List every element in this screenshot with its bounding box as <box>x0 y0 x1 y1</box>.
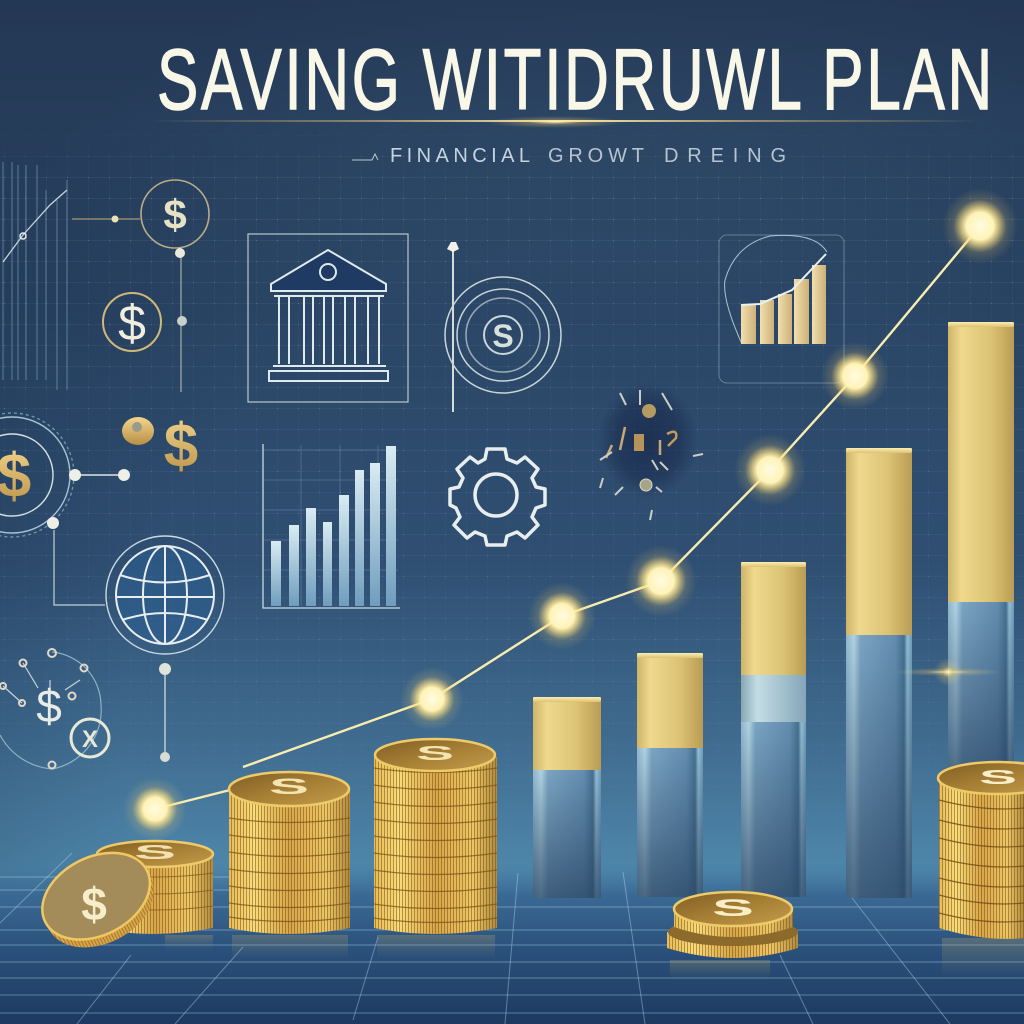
subtitle: FINANCIAL <box>390 145 530 167</box>
bar 5 <box>893 322 1014 782</box>
icon: gold coin and dollar sign <box>122 412 198 481</box>
subtitle <box>352 145 786 167</box>
bar 2 <box>637 653 703 897</box>
icon: spiral dollar target <box>445 242 561 412</box>
subtitle: GROWT <box>548 145 644 167</box>
icon: gear <box>450 449 545 545</box>
bar 1 <box>533 697 601 898</box>
coin stack: flat pair: S <box>712 895 754 922</box>
coin stack: right edge <box>938 762 1024 978</box>
icon: small line chart far left <box>3 162 67 390</box>
icon: dollar badge: $ <box>118 295 146 351</box>
icon: gold coin and dollar sign: $ <box>164 412 198 481</box>
coin stack: right edge: S <box>979 767 1017 789</box>
background <box>0 78 1024 891</box>
coin stack: tall <box>374 739 497 959</box>
bar 3 <box>741 562 806 897</box>
subtitle: DREING <box>664 145 786 167</box>
icon: bank <box>248 234 408 402</box>
coin stack: medium <box>229 772 350 959</box>
icon: dollar badge <box>103 293 161 351</box>
bar 4 <box>846 448 912 898</box>
icon: dollar network: X <box>82 726 98 753</box>
icon: spiral dollar target: S <box>492 318 514 354</box>
coin stack: small with leaning coin: $ <box>81 878 107 930</box>
growth line with glowing points <box>123 188 1018 841</box>
coin stack: flat pair <box>667 892 798 978</box>
icon: scattered glyph cluster <box>598 382 703 520</box>
icon: mini bar chart <box>263 444 400 608</box>
icon: dollar network: $ <box>36 680 62 732</box>
icon: pin line below globe <box>159 663 171 762</box>
icon: dollar network <box>0 649 109 769</box>
title: SAVING WITIDRUWL PLAN <box>157 31 992 127</box>
coin stack: medium: S <box>269 774 309 799</box>
coin stack: tall: S <box>416 743 454 765</box>
icon: dollar circle connector <box>72 180 209 392</box>
icon: globe <box>106 536 224 654</box>
floor grid <box>0 853 1024 1024</box>
icon: rounded growth chart <box>719 235 844 383</box>
icon: dollar circle connector: $ <box>163 191 187 238</box>
coin stack: small with leaning coin: S <box>134 842 176 864</box>
icon: concentric dollar target <box>0 413 130 605</box>
coin stack: small with leaning coin <box>28 836 213 965</box>
